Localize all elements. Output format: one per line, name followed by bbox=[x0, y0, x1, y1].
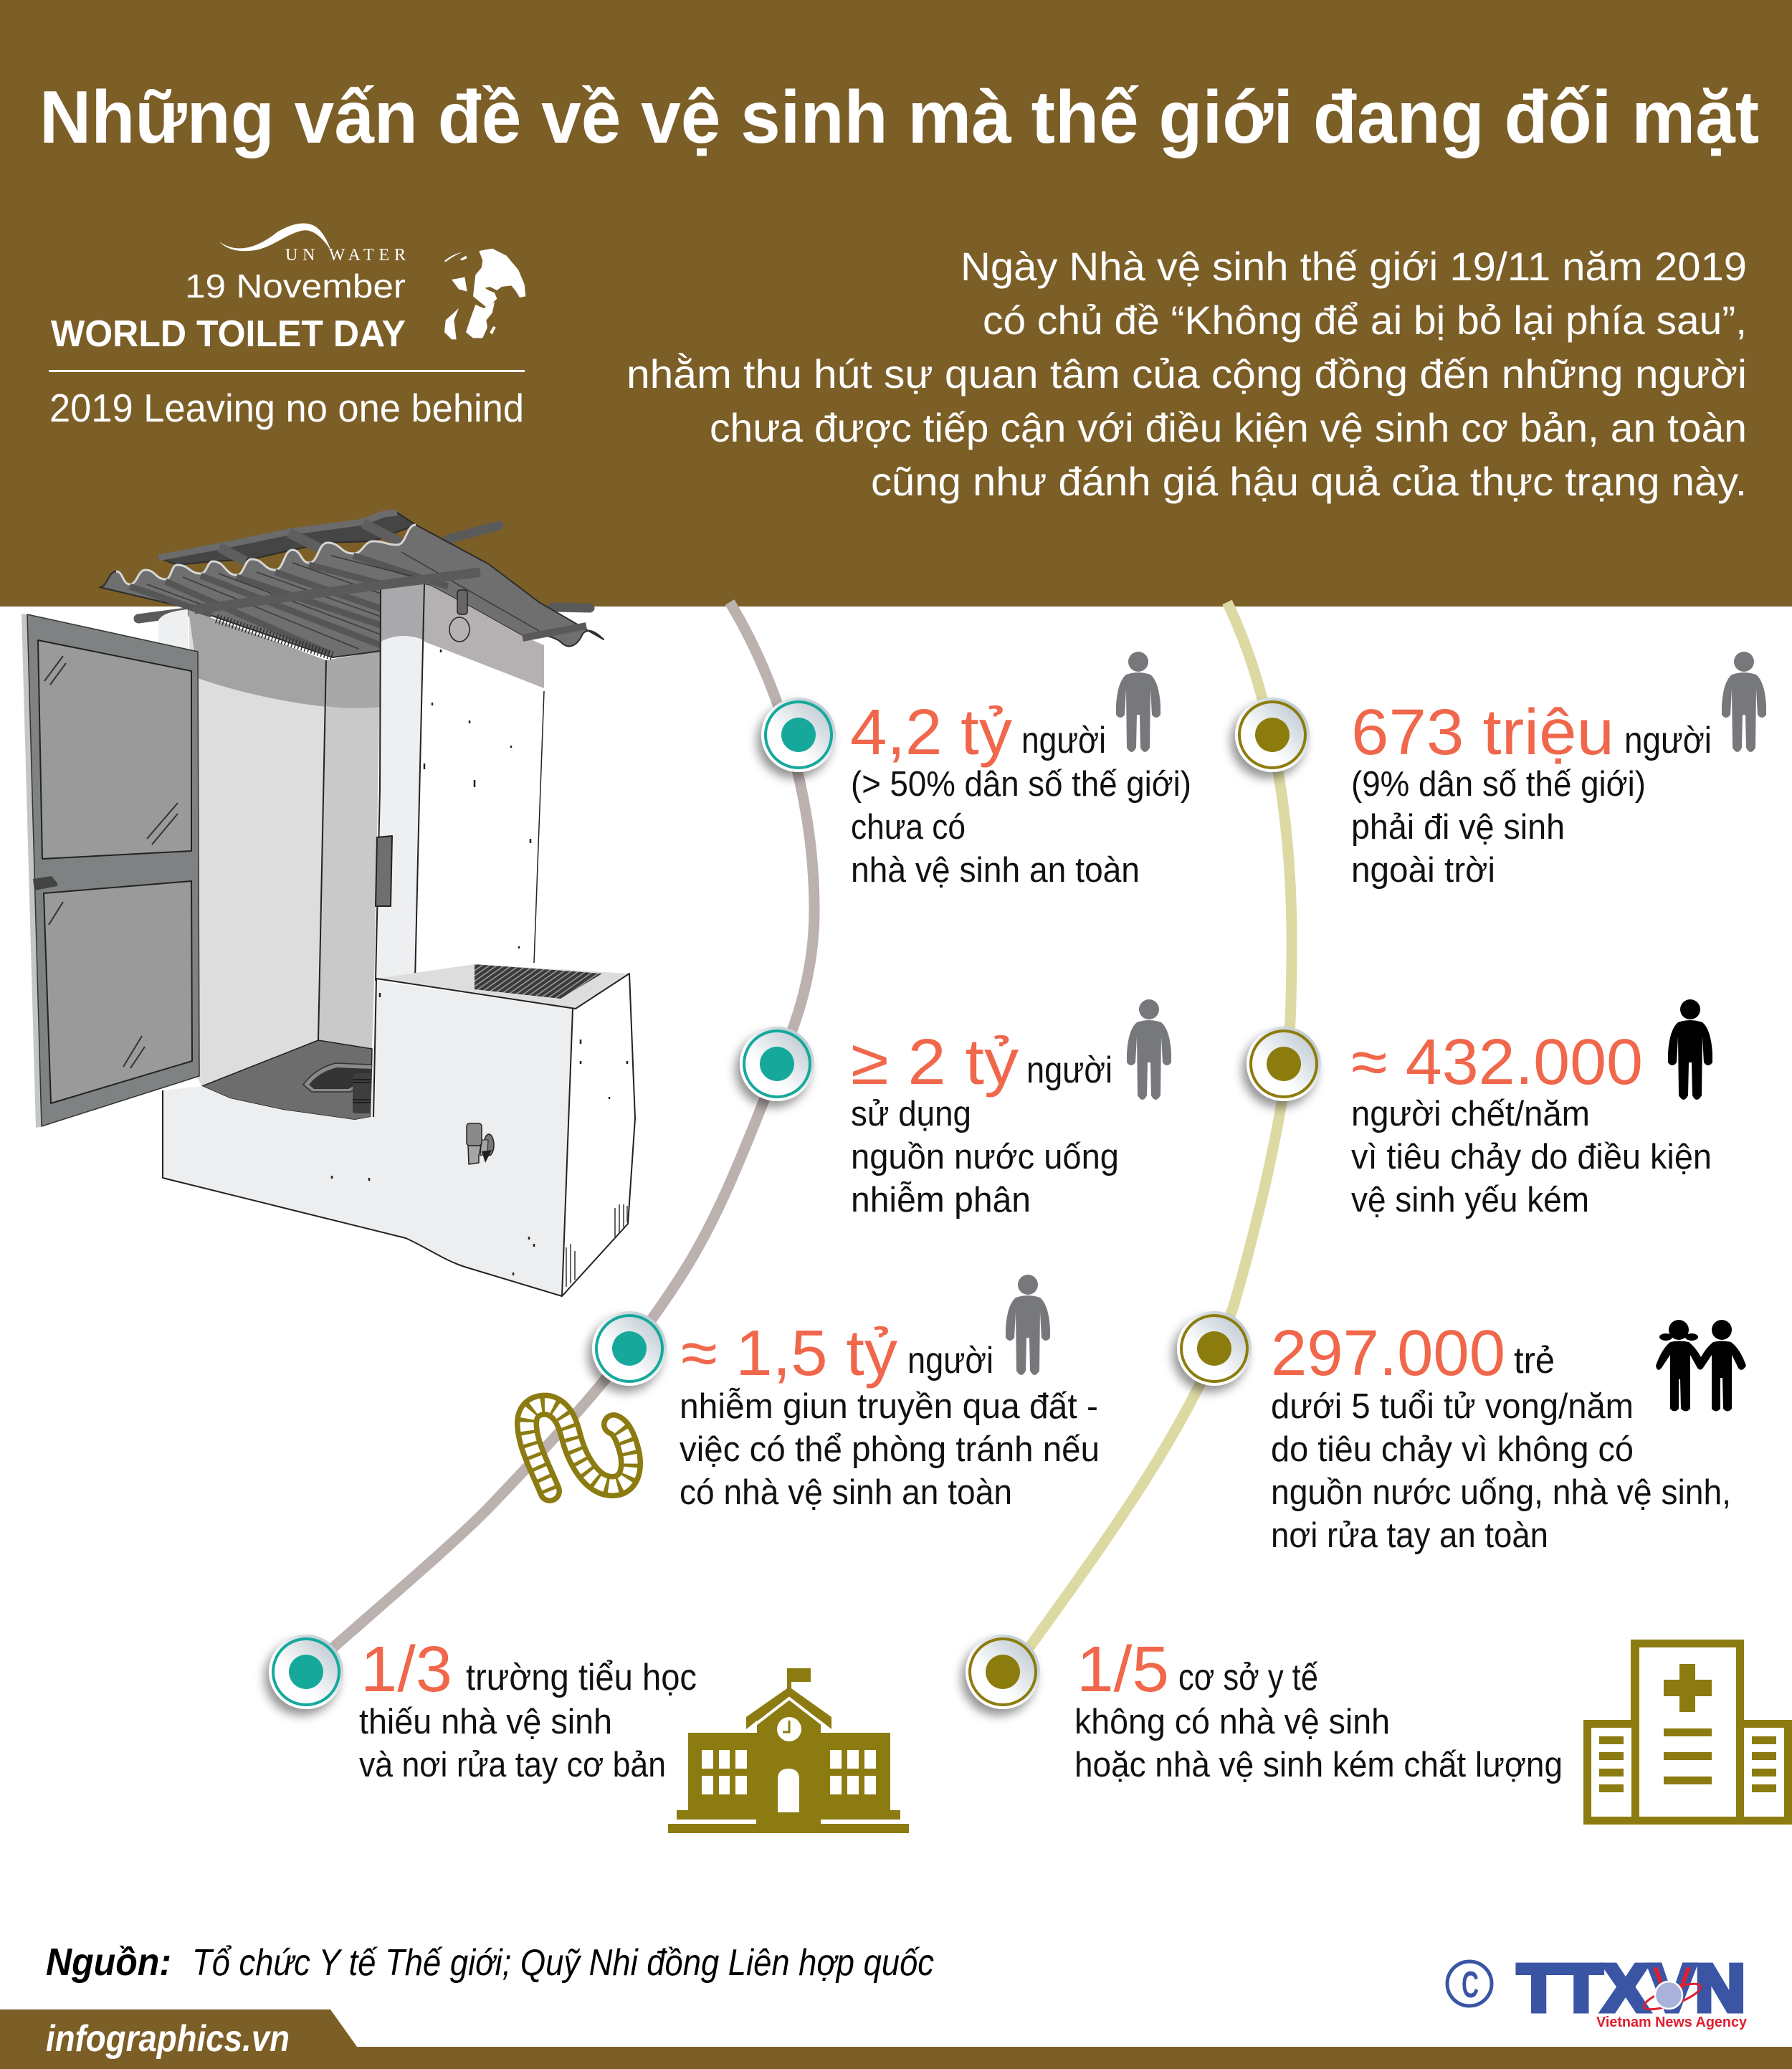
marker bbox=[966, 1635, 1040, 1709]
description bbox=[359, 1703, 666, 1784]
interior corner line bbox=[318, 660, 326, 1040]
figure: ≥ 2 tỷ bbox=[851, 1027, 1019, 1098]
description: do tiêu chảy vì không có bbox=[1271, 1430, 1634, 1469]
intro paragraph: có chủ đề “Không để ai bị bỏ lại phía sau”, bbox=[983, 298, 1747, 343]
figure: 673 triệu bbox=[1351, 697, 1614, 769]
under-roof hatch bbox=[216, 619, 333, 656]
divider bbox=[49, 370, 525, 372]
marker bbox=[592, 1311, 667, 1386]
right wall top shade bbox=[424, 584, 544, 688]
figure: 297.000 bbox=[1271, 1318, 1505, 1389]
description: nhiễm phân bbox=[851, 1181, 1031, 1219]
stat: 4.2 billion bbox=[761, 652, 1191, 890]
unit: người bbox=[1021, 720, 1106, 761]
description: và nơi rửa tay cơ bản bbox=[359, 1746, 666, 1784]
tank side bbox=[562, 974, 635, 1296]
cup bbox=[353, 1073, 371, 1113]
rear pipes behind the roof bbox=[138, 525, 590, 619]
description bbox=[1351, 1095, 1712, 1219]
tank opening bbox=[475, 964, 602, 999]
door bbox=[22, 614, 199, 1128]
upper door panel bbox=[38, 640, 191, 859]
description: chưa có bbox=[851, 808, 966, 847]
footer site name: infographics.vn bbox=[46, 2018, 290, 2060]
marker bbox=[761, 698, 836, 772]
front roof pipe bbox=[194, 572, 480, 609]
unit: người bbox=[907, 1340, 993, 1381]
description bbox=[1271, 1387, 1731, 1555]
description: việc có thể phòng tránh nếu bbox=[680, 1430, 1100, 1469]
intro paragraph: nhằm thu hút sự quan tâm của cộng đồng đến những người bbox=[626, 351, 1747, 396]
marker bbox=[740, 1027, 814, 1101]
description: (9% dân số thế giới) bbox=[1351, 765, 1646, 804]
icon: person bbox=[1116, 652, 1160, 752]
copyright mark: C bbox=[1462, 1964, 1479, 2006]
description: nơi rửa tay an toàn bbox=[1271, 1516, 1548, 1555]
intro paragraph bbox=[626, 244, 1747, 504]
figure: 1/5 bbox=[1077, 1634, 1169, 1706]
UN Water swoosh bbox=[219, 224, 332, 252]
wall speckles bbox=[332, 650, 627, 1275]
description: nhiễm giun truyền qua đất - bbox=[680, 1387, 1098, 1426]
toilet illustration bbox=[22, 513, 635, 1296]
description: người chết/năm bbox=[1351, 1095, 1590, 1133]
agency tagline: Vietnam News Agency bbox=[1596, 2015, 1748, 2030]
unit: người bbox=[1624, 720, 1712, 761]
unit: cơ sở y tế bbox=[1178, 1657, 1318, 1698]
marker bbox=[269, 1635, 343, 1709]
description: vì tiêu chảy do điều kiện bbox=[1351, 1138, 1712, 1176]
description: hoặc nhà vệ sinh kém chất lượng bbox=[1074, 1746, 1563, 1784]
globe emblem bbox=[1641, 1979, 1703, 2015]
description bbox=[851, 1095, 1119, 1219]
TTXVN logo bbox=[1447, 1951, 1748, 2030]
squat pan bbox=[303, 1063, 372, 1092]
tank top bbox=[376, 964, 629, 1009]
figure: ≈ 432.000 bbox=[1351, 1027, 1643, 1098]
description: sử dụng bbox=[851, 1095, 971, 1133]
lower door panel bbox=[44, 881, 192, 1103]
figure: 4,2 tỷ bbox=[850, 697, 1012, 769]
UN Water label: UN WATER bbox=[285, 246, 406, 265]
description: (> 50% dân số thế giới) bbox=[851, 765, 1191, 804]
door frame bbox=[27, 614, 199, 1126]
icon: person bbox=[1006, 1275, 1050, 1375]
icon: hospital bbox=[1583, 1640, 1792, 1825]
base outlines bbox=[163, 974, 635, 1296]
stat: 297,000 children bbox=[1177, 1311, 1746, 1555]
stat: 1.5 billion bbox=[527, 1275, 1100, 1512]
icon: person bbox=[1127, 999, 1171, 1100]
icon: black person bbox=[1668, 999, 1712, 1100]
tank bottom hatch bbox=[566, 1204, 627, 1287]
agency wordmark: TTXVN bbox=[1517, 1951, 1745, 2025]
source line: Nguồn: bbox=[46, 1941, 171, 1984]
pillar bbox=[376, 584, 424, 981]
World Toilet Day name: WORLD TOILET DAY bbox=[51, 313, 406, 355]
icon: two children bbox=[1656, 1320, 1746, 1411]
source line: Tổ chức Y tế Thế giới; Quỹ Nhi đồng Liên hợp quốc bbox=[192, 1942, 934, 1984]
icon: person bbox=[1722, 652, 1766, 752]
stat: one fifth of health facilities bbox=[966, 1634, 1792, 1825]
lower right pipe bbox=[523, 626, 586, 638]
left timeline curve bbox=[315, 602, 814, 1663]
description: có nhà vệ sinh an toàn bbox=[680, 1473, 1012, 1512]
stat: one third of schools bbox=[269, 1634, 909, 1833]
description bbox=[851, 765, 1191, 890]
figure: ≈ 1,5 tỷ bbox=[681, 1318, 897, 1389]
marker bbox=[1247, 1027, 1321, 1101]
description: ngoài trời bbox=[1351, 851, 1495, 890]
door latch bbox=[33, 876, 57, 890]
rear roof rim bbox=[158, 513, 397, 558]
description: phải đi vệ sinh bbox=[1351, 808, 1565, 847]
door light edge bbox=[22, 614, 44, 1128]
floor bbox=[202, 1040, 372, 1120]
light bulb bbox=[449, 590, 470, 642]
date: 19 November bbox=[185, 267, 406, 305]
copyright mark bbox=[1447, 1961, 1492, 2006]
unit: trẻ bbox=[1514, 1340, 1555, 1381]
icon: worm bbox=[527, 1405, 631, 1491]
interior right wall bbox=[318, 651, 381, 1049]
rear roof bbox=[158, 513, 416, 565]
roof sheet bbox=[100, 525, 604, 657]
marker bbox=[1235, 698, 1310, 772]
description: thiếu nhà vệ sinh bbox=[359, 1703, 612, 1741]
figure: 1/3 bbox=[361, 1634, 452, 1706]
description: nguồn nước uống, nhà vệ sinh, bbox=[1271, 1473, 1731, 1512]
description bbox=[1351, 765, 1646, 890]
unit: người bbox=[1026, 1050, 1112, 1091]
footer band bbox=[0, 2009, 1792, 2069]
globe emblem bbox=[444, 249, 525, 339]
description: vệ sinh yếu kém bbox=[1351, 1181, 1589, 1219]
door latch plate bbox=[376, 836, 392, 906]
right wall outline bbox=[534, 691, 544, 963]
description: nhà vệ sinh an toàn bbox=[851, 851, 1140, 890]
stat: 2 billion bbox=[740, 999, 1171, 1219]
roof wave highlight bbox=[116, 525, 416, 584]
World Toilet Day logo bbox=[49, 224, 525, 430]
description: nguồn nước uống bbox=[851, 1138, 1119, 1176]
left pillar top bbox=[158, 609, 188, 649]
intro paragraph: Ngày Nhà vệ sinh thế giới 19/11 năm 2019 bbox=[961, 244, 1747, 289]
interior left wall bbox=[189, 609, 326, 1086]
description: dưới 5 tuổi tử vong/năm bbox=[1271, 1387, 1634, 1426]
intro paragraph: cũng như đánh giá hậu quả của thực trạng này. bbox=[871, 459, 1747, 504]
title: Những vấn đề về vệ sinh mà thế giới đang đối mặt bbox=[39, 76, 1759, 159]
roof rafters bbox=[219, 523, 401, 561]
marker bbox=[1177, 1311, 1252, 1386]
glass glints bbox=[44, 656, 178, 1068]
stat: 432,000 deaths bbox=[1247, 999, 1712, 1219]
description bbox=[680, 1387, 1100, 1512]
theme line: 2019 Leaving no one behind bbox=[49, 386, 524, 430]
unit: trường tiểu học bbox=[466, 1657, 697, 1698]
description bbox=[1074, 1703, 1563, 1784]
tap bbox=[467, 1123, 494, 1164]
stat: 673 million bbox=[1235, 652, 1766, 890]
description: không có nhà vệ sinh bbox=[1074, 1703, 1390, 1741]
base block front bbox=[163, 981, 573, 1296]
right timeline curve bbox=[1018, 602, 1292, 1663]
intro paragraph: chưa được tiếp cận với điều kiện vệ sinh cơ bản, an toàn bbox=[710, 405, 1747, 450]
header background band bbox=[0, 0, 1792, 607]
icon: school bbox=[668, 1668, 909, 1833]
roof corrugation shading bbox=[130, 556, 448, 654]
